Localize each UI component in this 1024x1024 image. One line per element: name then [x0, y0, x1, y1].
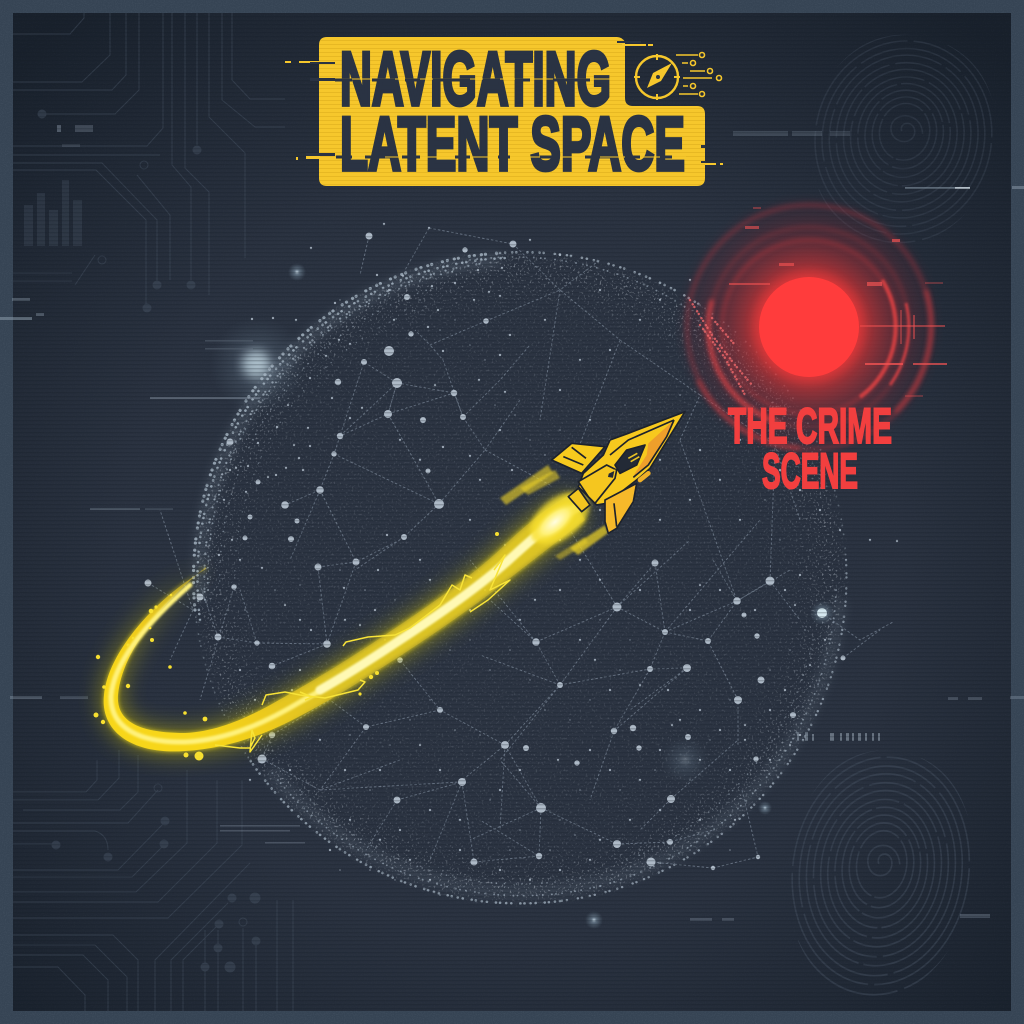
- circuit traces: top left: [13, 13, 285, 312]
- red streaks: [729, 207, 947, 397]
- title banner: [285, 37, 723, 187]
- circuit traces: bottom left: [13, 750, 293, 1011]
- red core: [755, 273, 863, 381]
- title glitch lines: [335, 79, 686, 157]
- trail glow: [104, 495, 585, 751]
- sphere dust texture: [185, 240, 855, 915]
- title text: NAVIGATING: [340, 37, 611, 122]
- red target: the crime scene: [674, 192, 947, 462]
- red particles on sphere rim: [690, 300, 752, 395]
- bar chart ghost: [24, 180, 82, 246]
- banner plate: [319, 37, 705, 186]
- trail body: [104, 495, 585, 751]
- rocket nozzle: [568, 488, 590, 512]
- rocket flames: [500, 465, 608, 560]
- trail sparks: [94, 532, 499, 760]
- small network dots: [210, 224, 897, 895]
- network sphere: [144, 224, 897, 929]
- cockpit: [615, 445, 645, 473]
- lightning arcs: [215, 555, 510, 752]
- rocket lower wing: [605, 483, 637, 533]
- barcode glitch: [797, 732, 880, 741]
- label: the crime scene: [728, 398, 892, 499]
- compass speed lines: [676, 52, 722, 96]
- icon: fingerprint top right: [780, 8, 1024, 270]
- rocket mid body: [578, 465, 617, 503]
- title text: LATENT SPACE: [340, 102, 685, 187]
- banner edge dashes: [285, 44, 723, 165]
- network links: [148, 228, 893, 868]
- icon: fingerprint bottom right: [761, 728, 1000, 1018]
- red glow: [674, 192, 944, 462]
- yellow comet trail: [94, 465, 608, 760]
- data streaks and glitch bars: [0, 125, 1024, 921]
- icon: rocket: [552, 412, 685, 533]
- network nodes: [144, 232, 846, 870]
- label: the crime scene: SCENE: [762, 443, 858, 499]
- icon: compass: [634, 54, 680, 100]
- title text: [340, 37, 685, 187]
- red rings: [687, 205, 931, 449]
- label: the crime scene: THE CRIME: [728, 398, 892, 454]
- trail core: [111, 507, 578, 742]
- rocket hull: [578, 412, 685, 505]
- rocket nose panel: [633, 420, 674, 476]
- sphere rim glow: [199, 260, 840, 929]
- dotted rim arcs: [193, 252, 846, 903]
- rocket upper wing: [552, 443, 605, 473]
